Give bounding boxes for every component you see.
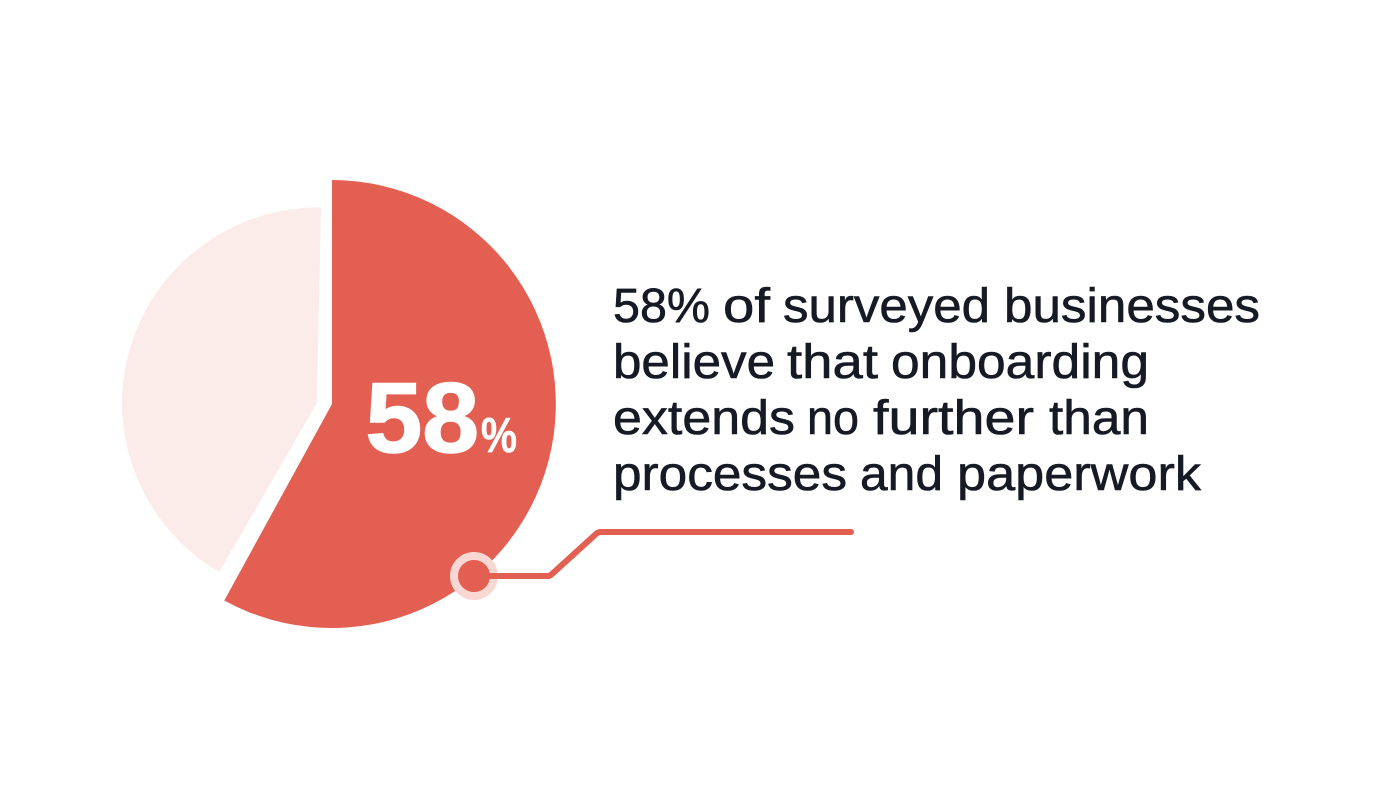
- description text: paperwork: [957, 448, 1202, 501]
- description text: businesses: [1004, 280, 1260, 333]
- description text: no: [807, 392, 859, 445]
- description text: extends: [613, 392, 795, 445]
- pie value label: %: [481, 409, 517, 463]
- description text: 58%: [613, 280, 710, 333]
- description text: than: [1049, 392, 1149, 445]
- callout connector line: [489, 532, 851, 576]
- description text: of: [723, 280, 771, 333]
- description text: further: [873, 392, 1034, 445]
- pie chart: [122, 180, 556, 628]
- description text: that: [787, 336, 878, 389]
- pie slice: 58%: [224, 180, 556, 628]
- callout marker dot: [454, 556, 494, 596]
- description text: processes: [613, 448, 847, 501]
- pie value label: 58: [366, 362, 479, 473]
- description text: and: [860, 448, 943, 501]
- description text: onboarding: [891, 336, 1149, 389]
- description text: believe: [613, 336, 775, 389]
- description text: surveyed: [783, 280, 990, 333]
- pie slice: remaining 42%: [122, 207, 321, 572]
- description text: [613, 280, 1260, 501]
